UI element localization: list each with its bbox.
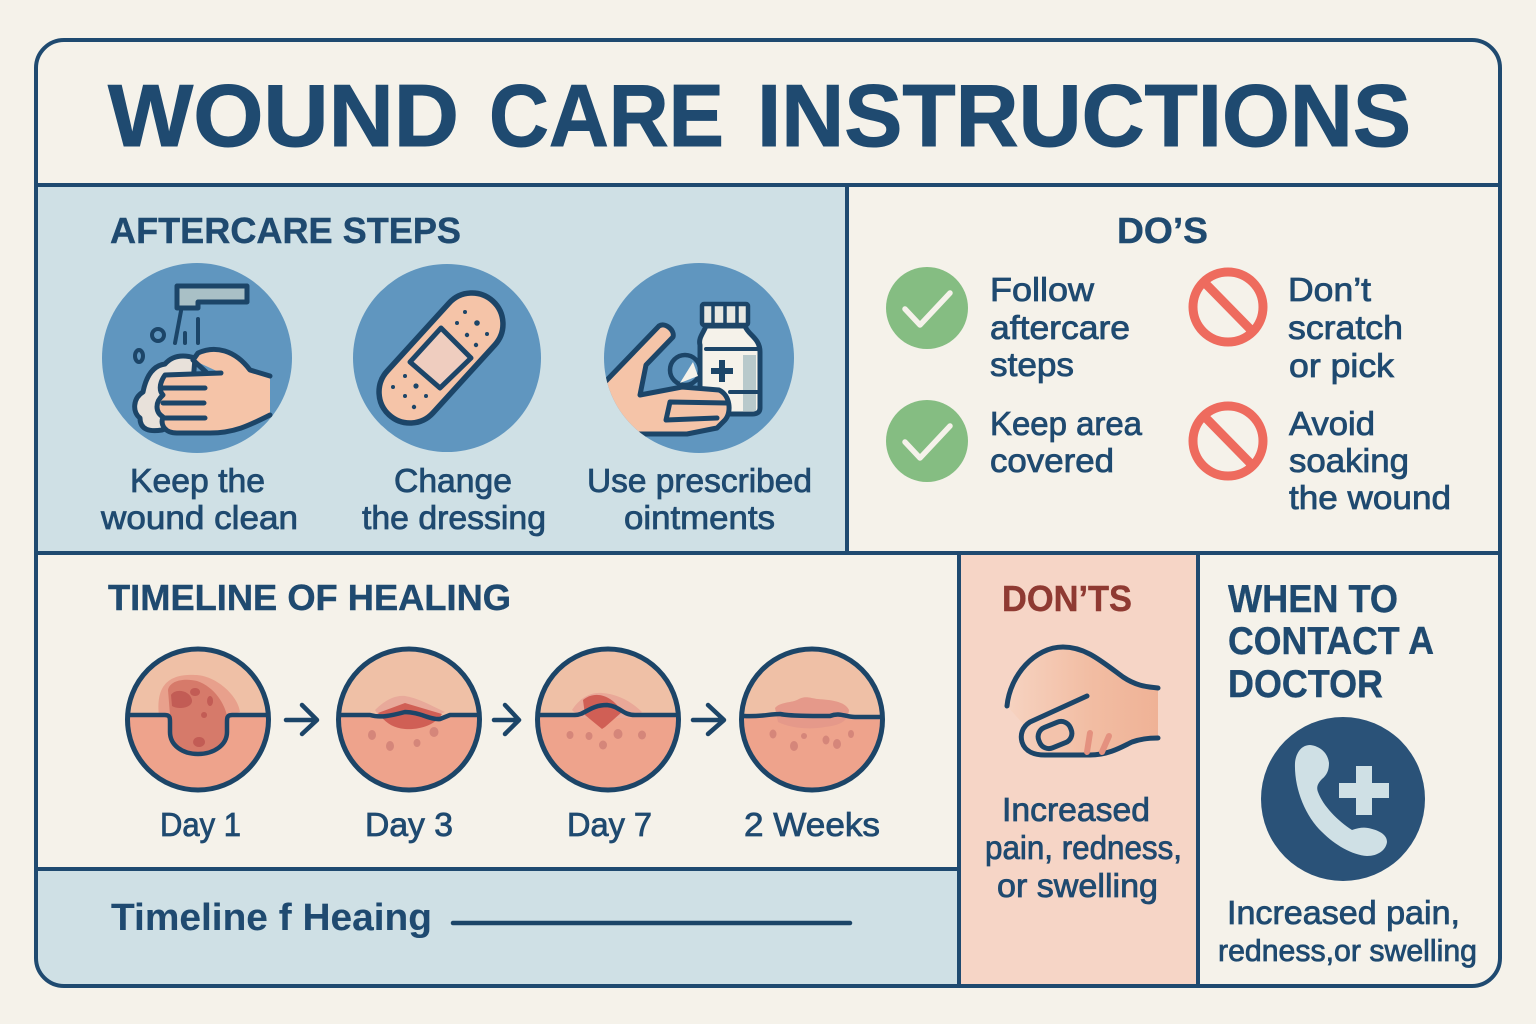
- text: increased pain, redness, or swelling: [985, 791, 1182, 904]
- label: day 3: Day 3: [365, 806, 453, 843]
- label: 2 weeks: 2 Weeks: [744, 806, 880, 843]
- wound stage: day 3: [336, 646, 482, 792]
- panel: timeline footer: [38, 869, 959, 984]
- icon: hand washing: [102, 263, 292, 453]
- icon: prohibition soaking: [1193, 406, 1263, 476]
- text: keep area covered: [990, 405, 1143, 479]
- arrow: [494, 705, 519, 734]
- text: follow aftercare steps: [990, 271, 1130, 383]
- text: don't scratch or pick: or pick: [1289, 347, 1395, 384]
- panel: aftercare steps: [38, 185, 847, 553]
- wound stage: 2 weeks: [739, 646, 885, 792]
- text: increased pain, redness, or swelling: Increased pain,: [1227, 894, 1460, 931]
- arrow: [286, 705, 317, 734]
- heading: aftercare steps: AFTERCARE STEPS: [110, 210, 461, 251]
- heading: when to contact a doctor: CONTACT A: [1228, 620, 1434, 663]
- wound stage: day 7: [535, 646, 681, 792]
- heading: don'ts: DON’TS: [1002, 578, 1132, 619]
- panel: do's: [886, 210, 1451, 516]
- text: follow aftercare steps: steps: [990, 346, 1074, 383]
- text: keep the wound clean: [100, 462, 298, 536]
- heading: when to contact a doctor: [1228, 578, 1434, 706]
- text: use prescribed ointments: [587, 462, 812, 536]
- label: day 7: Day 7: [567, 806, 652, 843]
- text: change the dressing: Change: [394, 462, 512, 499]
- text: increased pain, redness, or swelling: or swelling: [997, 867, 1158, 904]
- text: increased pain, redness, or swelling: pain, redness,: [985, 829, 1182, 866]
- text: keep the wound clean: wound clean: [100, 499, 298, 536]
- text: avoid soaking the wound: the wound: [1289, 479, 1451, 516]
- text: avoid soaking the wound: Avoid: [1289, 405, 1375, 442]
- panel: when to contact a doctor: [1218, 578, 1477, 968]
- text: increased pain, redness, or swelling: [1218, 894, 1477, 968]
- footer rule: [453, 921, 850, 925]
- label: day 1: Day 1: [160, 806, 241, 843]
- panel: timeline of healing: [108, 577, 895, 843]
- text: avoid soaking the wound: [1289, 405, 1451, 516]
- heading: timeline of healing: TIMELINE OF HEALING: [108, 577, 511, 618]
- text: don't scratch or pick: scratch: [1288, 309, 1403, 346]
- text: increased pain, redness, or swelling: redness,or swelling: [1218, 933, 1477, 968]
- icon: ointment bottle and hand: [600, 263, 794, 453]
- text: don't scratch or pick: [1288, 271, 1403, 384]
- heading: do's: DO’S: [1117, 210, 1208, 251]
- text: timeline footer label: Timeline f Heaing: [111, 897, 432, 939]
- text: change the dressing: [362, 462, 546, 536]
- wound stage: day 1: [125, 646, 271, 792]
- text: keep the wound clean: Keep the: [130, 462, 265, 499]
- text: use prescribed ointments: ointments: [624, 499, 775, 536]
- icon: prohibition scratch: [1193, 272, 1263, 342]
- title: WOUND: [108, 66, 459, 165]
- heading: when to contact a doctor: DOCTOR: [1228, 663, 1383, 706]
- title: [108, 66, 1411, 165]
- text: use prescribed ointments: Use prescribed: [587, 462, 812, 499]
- panel: title: [108, 66, 1411, 165]
- text: change the dressing: the dressing: [362, 499, 546, 536]
- panel: don'ts: [961, 555, 1197, 984]
- text: don't scratch or pick: Don’t: [1288, 271, 1371, 308]
- icon: phone with medical cross: [1261, 717, 1425, 881]
- icon: check keep covered: [886, 400, 968, 482]
- text: follow aftercare steps: aftercare: [990, 309, 1130, 346]
- text: keep area covered: Keep area: [990, 405, 1143, 442]
- icon: injured hand: [1007, 647, 1158, 755]
- text: follow aftercare steps: Follow: [990, 271, 1094, 308]
- arrow: [693, 705, 724, 734]
- icon: adhesive bandage: [353, 264, 541, 452]
- title: CARE: [489, 66, 724, 165]
- text: avoid soaking the wound: soaking: [1289, 442, 1409, 479]
- text: increased pain, redness, or swelling: Increased: [1002, 791, 1150, 828]
- title: INSTRUCTIONS: [757, 66, 1411, 165]
- heading: when to contact a doctor: WHEN TO: [1228, 578, 1398, 621]
- icon: check follow steps: [886, 267, 968, 349]
- text: keep area covered: covered: [990, 442, 1114, 479]
